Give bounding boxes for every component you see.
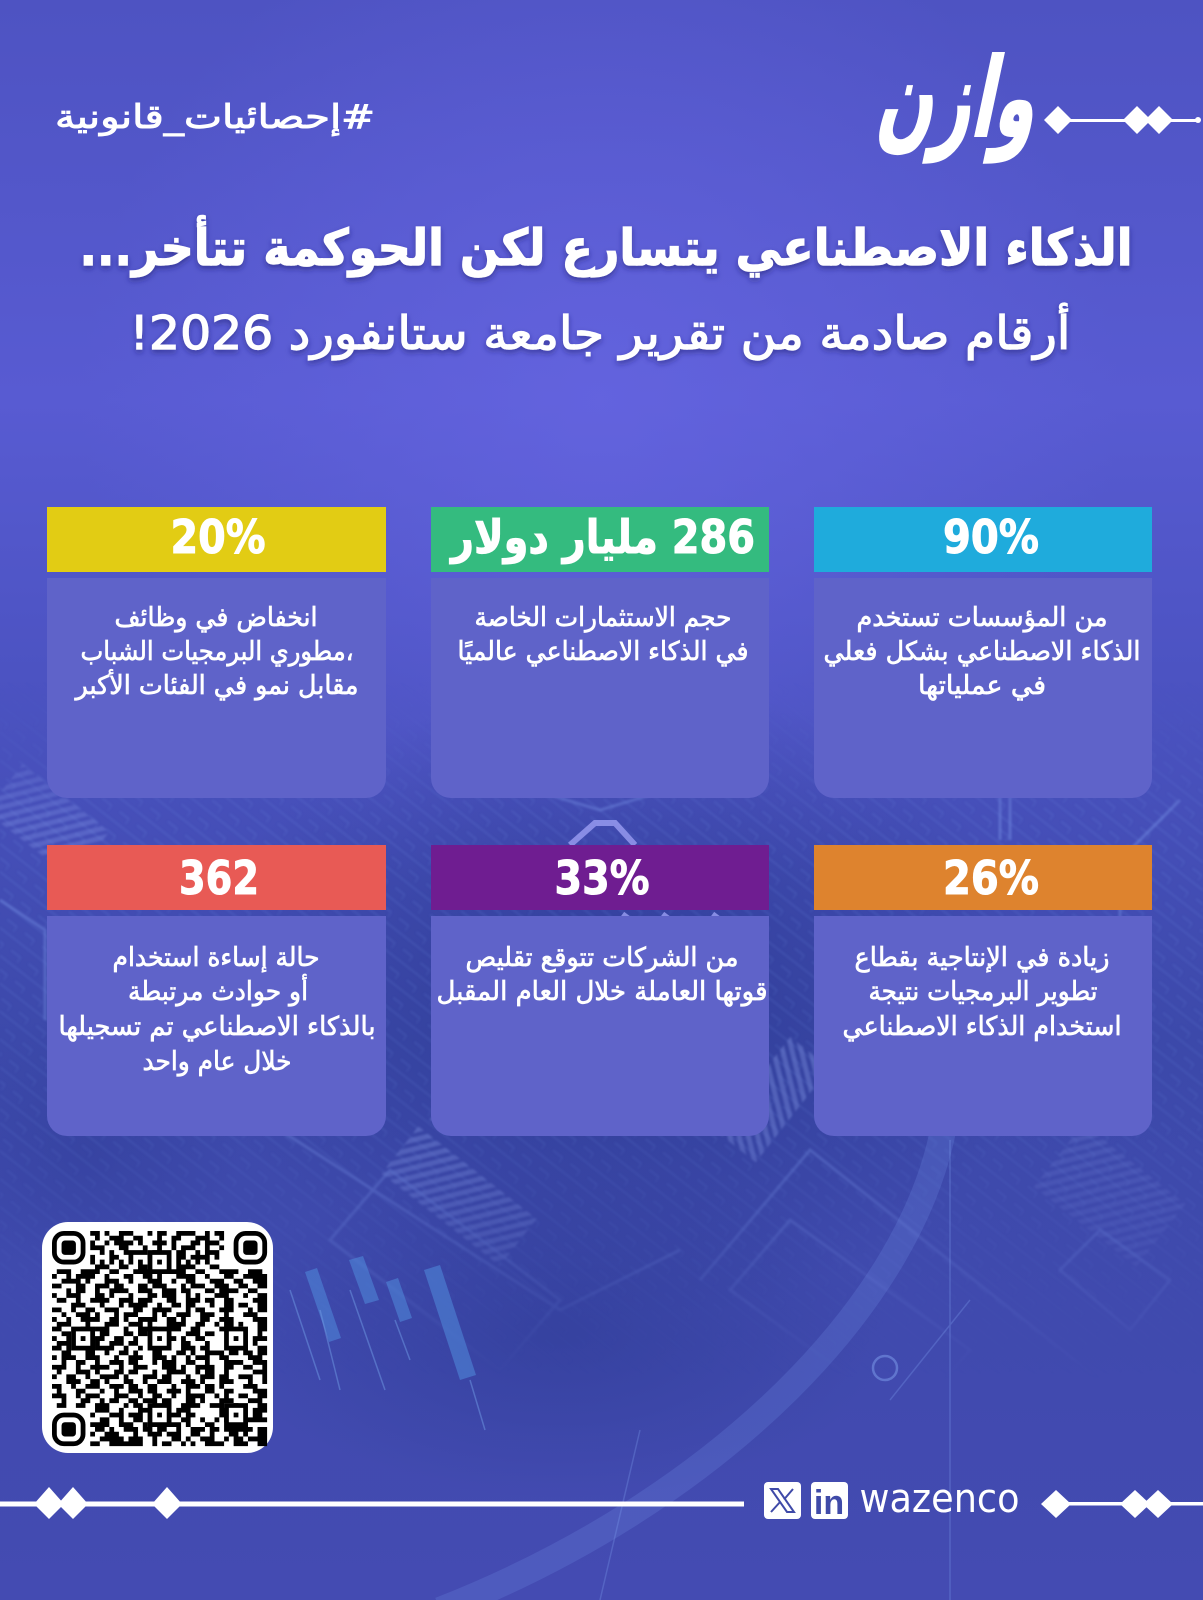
card: 362: بالذكاء الاصطناعي تم تسجيلها [58, 1012, 376, 1042]
card: 26% [814, 845, 1152, 1136]
card: 26%: تطوير البرمجيات نتيجة [868, 977, 1098, 1007]
footer ornament right [1041, 1490, 1203, 1518]
icon: X [764, 1482, 801, 1519]
card: 20%: 20% [170, 510, 266, 564]
icon: LinkedIn: in [814, 1484, 844, 1522]
brand name: wazenco [860, 1476, 1020, 1522]
title: الذكاء الاصطناعي يتسارع لكن الحوكمة تتأخر... [80, 215, 1132, 278]
card: 362: 362 [179, 851, 259, 905]
card: 362: حالة إساءة استخدام [112, 943, 320, 973]
card: 26%: استخدام الذكاء الاصطناعي [842, 1012, 1122, 1042]
alignment squares [71, 1250, 248, 1427]
card: 20% [47, 507, 386, 798]
card: 90% [814, 507, 1152, 798]
logo: wazen: وازن [869, 35, 1054, 163]
card: 362: أو حوادث مرتبطة [128, 973, 308, 1007]
card: 90%: 90% [943, 510, 1039, 564]
card: 33%: 33% [554, 851, 650, 905]
card: 33%: قوتها العاملة خلال العام المقبل [436, 977, 768, 1007]
card: 362 [47, 845, 386, 1136]
card: 362: خلال عام واحد [142, 1047, 292, 1077]
card: 20%: ،مطوري البرمجيات الشباب [80, 637, 354, 667]
candles [305, 1256, 476, 1380]
card: 26%: 26% [943, 851, 1039, 905]
card: 33% [431, 845, 769, 1136]
card: 26%: زيادة في الإنتاجية بقطاع [854, 943, 1110, 973]
card: 20%: انخفاض في وظائف [114, 603, 318, 633]
chip outline [515, 823, 717, 930]
top ornament line [1044, 106, 1201, 134]
card: 286 billion dollars [431, 507, 769, 798]
footer ornament left [0, 1487, 744, 1519]
card: 33%: من الشركات تتوقع تقليص [466, 943, 738, 973]
card: 90%: من المؤسسات تستخدم [856, 603, 1108, 633]
subtitle: أرقام صادمة من تقرير جامعة ستانفورد 2026! [130, 303, 1070, 361]
card: 286 billion dollars: حجم الاستثمارات الخاصة [474, 603, 732, 633]
card: 286 billion dollars: في الذكاء الاصطناعي عالميًا [458, 637, 748, 667]
card: 90%: في عملياتها [918, 671, 1046, 701]
finder squares [54, 1233, 265, 1444]
card: 286 billion dollars: 286 مليار دولار [449, 510, 755, 564]
QR code [42, 1222, 273, 1453]
card: 20%: مقابل نمو في الفئات الأكبر [74, 668, 358, 701]
card: 90%: الذكاء الاصطناعي بشكل فعلي [824, 637, 1140, 667]
big arc [440, 1120, 945, 1600]
hashtag: #إحصائيات_قانونية [55, 97, 375, 137]
